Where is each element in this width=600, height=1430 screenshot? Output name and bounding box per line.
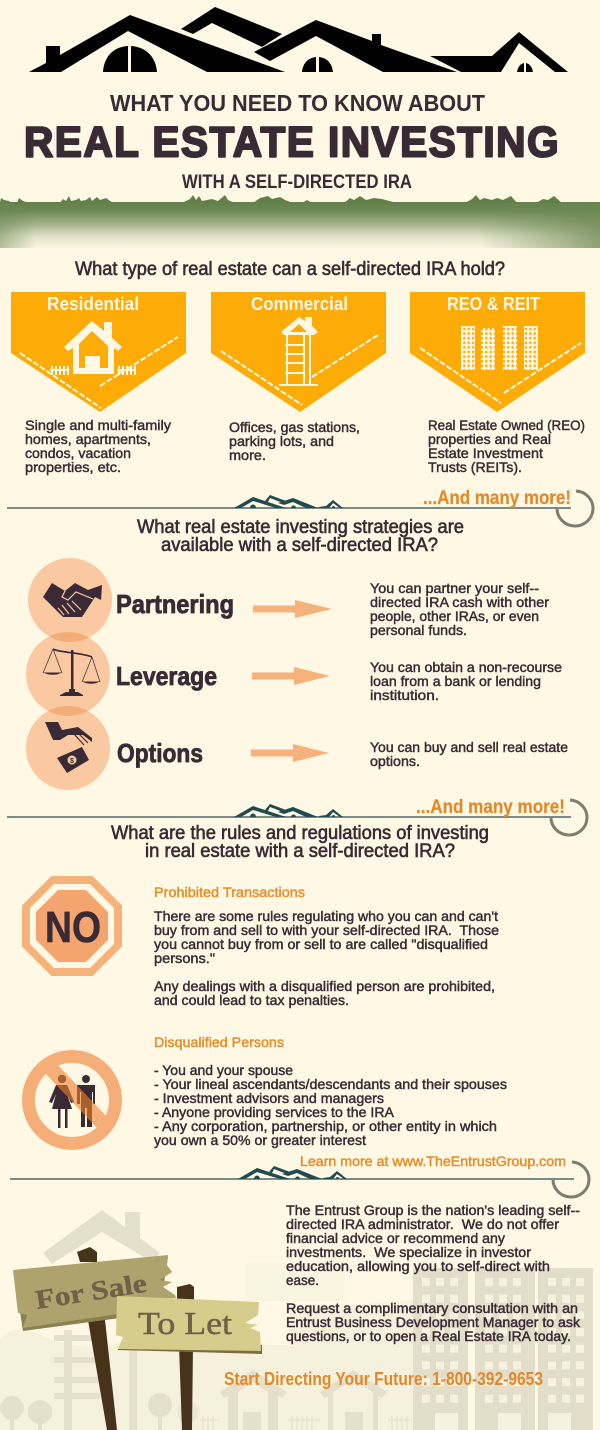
text: about The Entrust Group: Request a complimentary consultation with an [286,1300,578,1316]
divider with roofs and website link: Learn more at www.TheEntrustGroup.com [300,1153,566,1169]
text: about The Entrust Group [286,1202,581,1344]
text: about The Entrust Group: ease. [286,1272,319,1288]
text: partnering description: personal funds. [370,622,467,638]
text: REO and REIT description: properties and Real [428,431,551,447]
label: partnering: Partnering [116,589,234,619]
divider with roofs and callout 1 [7,488,593,526]
heading: rules: in real estate with a self-directed IRA? [145,841,455,862]
title: WHAT YOU NEED TO KNOW ABOUT [110,90,486,116]
text: partnering description: directed IRA cash with other [370,594,549,610]
icon: hand and money: $ [70,758,74,765]
text: options description: You can buy and sell real estate [370,739,568,755]
icon: hand and money [45,722,92,773]
text: commercial description: more. [229,447,266,463]
text: leverage description: loan from a bank or lending [370,673,541,689]
heading: rules: What are the rules and regulations of investing [111,823,489,844]
faded neighbourhood silhouette [0,1210,593,1430]
text: prohibited transactions body: There are some rules regulating who you can and can't [154,908,498,924]
heading: strategies: available with a self-directed IRA? [161,535,438,556]
heading: strategies: What real estate investing strategies are [137,517,464,538]
text: residential description: Single and multi-family [25,417,171,433]
text: prohibited transactions body: and could lead to tax penalties. [154,992,349,1008]
text: REO and REIT description: Real Estate Owned (REO) [428,417,585,433]
call to action phone number: Start Directing Your Future: 1-800-392-9653 [224,1369,543,1389]
icon: NO stop sign: NO [45,903,101,952]
text: partnering description: You can partner your self-- [370,580,539,596]
text: disqualified persons list: - Investment advisors and managers [154,1090,384,1106]
text: about The Entrust Group: investments. We specialize in investor [286,1244,531,1260]
text: REO and REIT description: Trusts (REITs). [428,459,522,475]
panel: REO and REIT: REO & REIT [447,294,540,314]
icon: handshake [43,583,102,617]
text: leverage description: You can obtain a non-recourse [370,659,562,675]
sign: To Let [116,1296,262,1354]
text: prohibited transactions body: buy from and sell to with your self-directed IRA. Those [154,922,499,938]
sign: For Sale: For Sale [33,1268,149,1315]
arrow: partnering [253,600,332,618]
divider with roofs and callout 2 [7,797,587,835]
panel: residential: Residential [47,294,139,314]
panel: residential [11,292,186,412]
icon: tower [279,317,318,385]
icon: NO stop sign [24,878,120,974]
text: leverage description [370,659,562,703]
text: disqualified persons list: - Anyone providing services to the IRA [154,1104,395,1120]
text: about The Entrust Group: questions, or to open a Real Estate IRA today. [286,1328,571,1344]
title: REAL ESTATE INVESTING [24,118,560,166]
heading: strategies [137,517,464,556]
text: residential description: properties, etc. [25,459,121,475]
text: disqualified persons list [154,1062,507,1148]
text: commercial description: Offices, gas stations, [229,419,360,435]
text: about The Entrust Group: The Entrust Group is the nation's leading self-- [286,1202,580,1218]
grass band [0,195,600,248]
divider with roofs and callout 1: ...And many more! [423,488,571,509]
label: leverage: Leverage [116,661,217,691]
title: WITH A SELF-DIRECTED IRA [182,172,412,193]
text: disqualified persons list: - Your lineal ascendants/descendants and their spouses [154,1076,507,1092]
sign: For Sale [13,1255,176,1331]
text: commercial description: parking lots, and [229,433,334,449]
text: residential description: homes, apartments, [25,431,151,447]
sign: To Let: To Let [138,1305,232,1341]
text: disqualified persons list: you own a 50% or greater interest [154,1132,366,1148]
text: options description [370,739,568,769]
divider with roofs and callout 2: ...And many more! [416,797,565,818]
icon: apartment towers [461,326,538,370]
text: prohibited transactions body: persons." [154,950,215,966]
title [24,90,560,193]
label: options: Options [117,738,203,768]
text: REO and REIT description [428,417,585,475]
text: about The Entrust Group: education, allowing you to self-direct with [286,1258,550,1274]
arrow: leverage [252,667,330,685]
panel: commercial: Commercial [251,294,348,314]
text: REO and REIT description: Estate Investment [428,445,543,461]
icon: scales [43,649,100,696]
text: prohibited transactions body: Any dealings with a disqualified person are prohibited, [154,978,495,994]
divider with roofs and website link [10,1153,589,1197]
sign posts [77,1247,194,1430]
text: residential description: condos, vacation [25,445,131,461]
text: options description: options. [370,753,420,769]
text: disqualified persons list: - Any corporation, partnership, or other entity in which [154,1118,497,1134]
text: prohibited transactions body [154,908,499,1008]
text: about The Entrust Group: Entrust Business Development Manager to ask [286,1314,581,1330]
text: partnering description: people, other IRAs, or even [370,608,539,624]
text: disqualified persons list: - You and your spouse [154,1062,293,1078]
heading: rules [111,823,489,862]
icon: prohibited people [28,1056,116,1144]
panel: REO and REIT [410,292,585,412]
text: residential description [25,417,171,475]
text: commercial description [229,419,360,463]
panel: strategy circles [26,558,112,790]
heading: prohibited transactions: Prohibited Transactions [154,884,305,900]
header roofline illustration [29,7,568,72]
text: leverage description: institution. [370,687,439,703]
heading: property types: What type of real estate can a self-directed IRA hold? [75,259,505,280]
text: prohibited transactions body: you cannot buy from or sell to are called "disqualified [154,936,488,952]
text: about The Entrust Group: directed IRA administrator. We do not offer [286,1216,559,1232]
text: about The Entrust Group: financial advice or recommend any [286,1230,505,1246]
arrow: options [251,744,329,762]
heading: disqualified persons: Disqualified Persons [154,1034,284,1050]
text: partnering description [370,580,549,638]
icon: house [50,321,136,375]
panel: commercial [211,292,386,412]
